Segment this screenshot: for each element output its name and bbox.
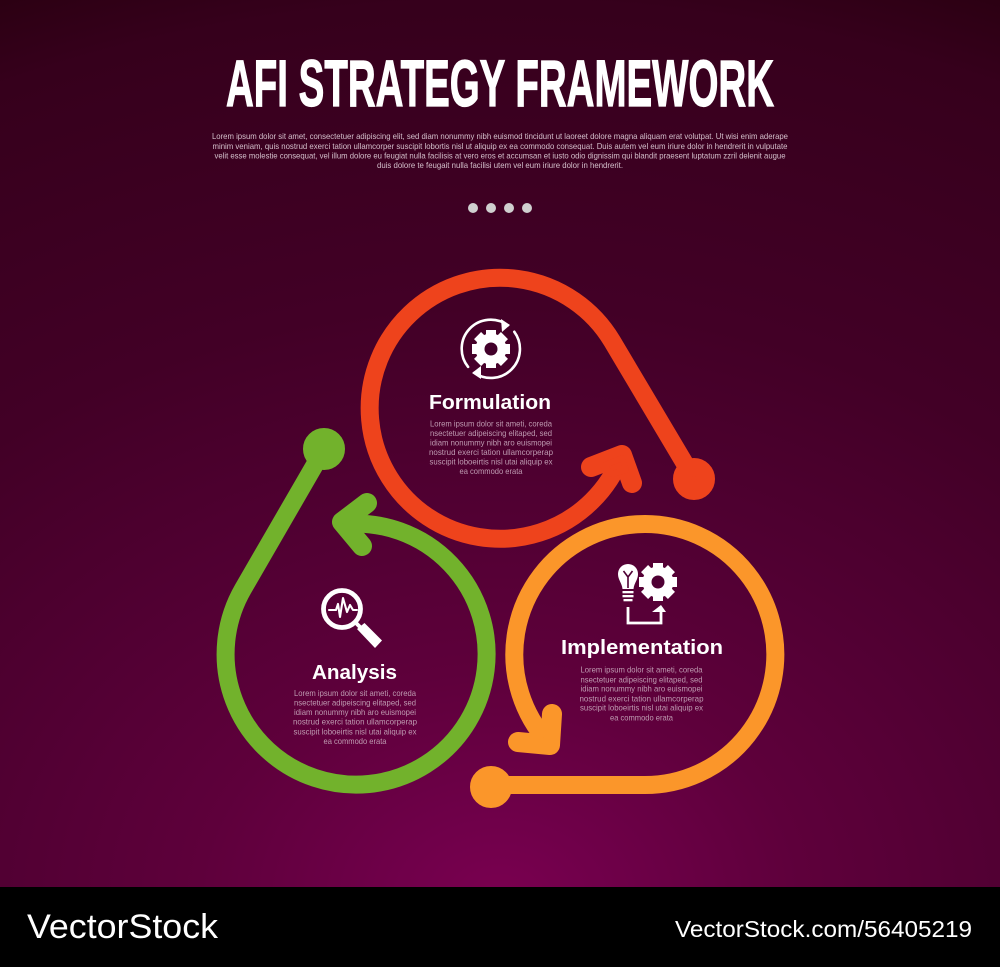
intro paragraph: velit esse molestie consequat, vel illum dolore eu feugiat nulla facilisis at vero eros et accumsan et iusto odio dignissim qui blandit praesent luptatum zzril delenit augue bbox=[214, 150, 786, 160]
footer image id: VectorStock.com/56405219 bbox=[675, 916, 972, 942]
text block: Analysis: ea commodo erata bbox=[324, 736, 387, 746]
icon: magnifier with pulse bbox=[324, 590, 382, 648]
icon: gear with cycle arrows bbox=[462, 319, 520, 379]
text block: Formulation: nostrud exerci tation ullamcorperap bbox=[429, 447, 553, 457]
text block: Implementation: Lorem ipsum dolor sit ameti, coreda bbox=[580, 665, 703, 675]
intro paragraph: duis dolore te feugait nulla facilisi utem vel eum iriure dolor in hendrerit. bbox=[377, 160, 623, 170]
text block: Formulation: suscipit loboeirtis nisl utai aliquip ex bbox=[430, 457, 553, 467]
heading: Formulation: Formulation bbox=[429, 392, 551, 414]
text block: Formulation: nsectetuer adipeiscing elitaped, sed bbox=[430, 428, 552, 438]
intro paragraph bbox=[212, 131, 788, 170]
panel: implementation bbox=[479, 524, 775, 799]
icon: bulb, gear and process arrow bbox=[618, 563, 677, 623]
intro paragraph: minim veniam, quis nostrud exerci tation ullamcorper suscipit lobortis nisl ut aliquip ex ea commodo consequat. Duis autem vel eum iriure dolor in hendrerit in vulputate bbox=[212, 141, 788, 151]
text block: Analysis: Lorem ipsum dolor sit ameti, coreda bbox=[294, 688, 416, 698]
text block: Implementation: nsectetuer adipeiscing elitaped, sed bbox=[580, 674, 703, 684]
footer logo: VectorStock bbox=[27, 908, 219, 946]
heading: Implementation: Implementation bbox=[561, 637, 723, 659]
text block: Implementation: suscipit loboeirtis nisl utai aliquip ex bbox=[580, 703, 704, 713]
green loop arrow bbox=[226, 437, 487, 785]
footer bar bbox=[0, 887, 1000, 967]
text block: Formulation: idiam nonummy nibh aro euismopei bbox=[430, 438, 552, 448]
text block: Implementation: ea commodo erata bbox=[610, 712, 673, 722]
text block: Formulation bbox=[429, 418, 553, 476]
panel: formulation bbox=[370, 278, 706, 539]
heading: Analysis: Analysis bbox=[312, 662, 397, 684]
text block: Analysis: suscipit loboeirtis nisl utai aliquip ex bbox=[294, 726, 417, 736]
text block: Implementation: nostrud exerci tation ullamcorperap bbox=[580, 693, 704, 703]
text block: Formulation: ea commodo erata bbox=[460, 466, 523, 476]
text block: Analysis: nostrud exerci tation ullamcorperap bbox=[293, 717, 417, 727]
text block: Implementation: idiam nonummy nibh aro euismopei bbox=[580, 684, 703, 694]
pagination dots bbox=[468, 203, 532, 213]
text block: Formulation: Lorem ipsum dolor sit ameti, coreda bbox=[430, 418, 552, 428]
red loop arrow bbox=[370, 278, 706, 539]
orange loop arrow bbox=[479, 524, 775, 799]
text block: Analysis bbox=[293, 688, 417, 746]
text block: Analysis: nsectetuer adipeiscing elitaped, sed bbox=[294, 698, 416, 708]
text block: Analysis: idiam nonummy nibh aro euismopei bbox=[294, 707, 416, 717]
intro paragraph: Lorem ipsum dolor sit amet, consectetuer adipiscing elit, sed diam nonummy nibh euismod tincidunt ut laoreet dolore magna aliquam erat volutpat. Ut wisi enim aderape bbox=[212, 131, 788, 141]
text block: Implementation bbox=[580, 665, 704, 722]
panel: analysis bbox=[226, 437, 487, 785]
